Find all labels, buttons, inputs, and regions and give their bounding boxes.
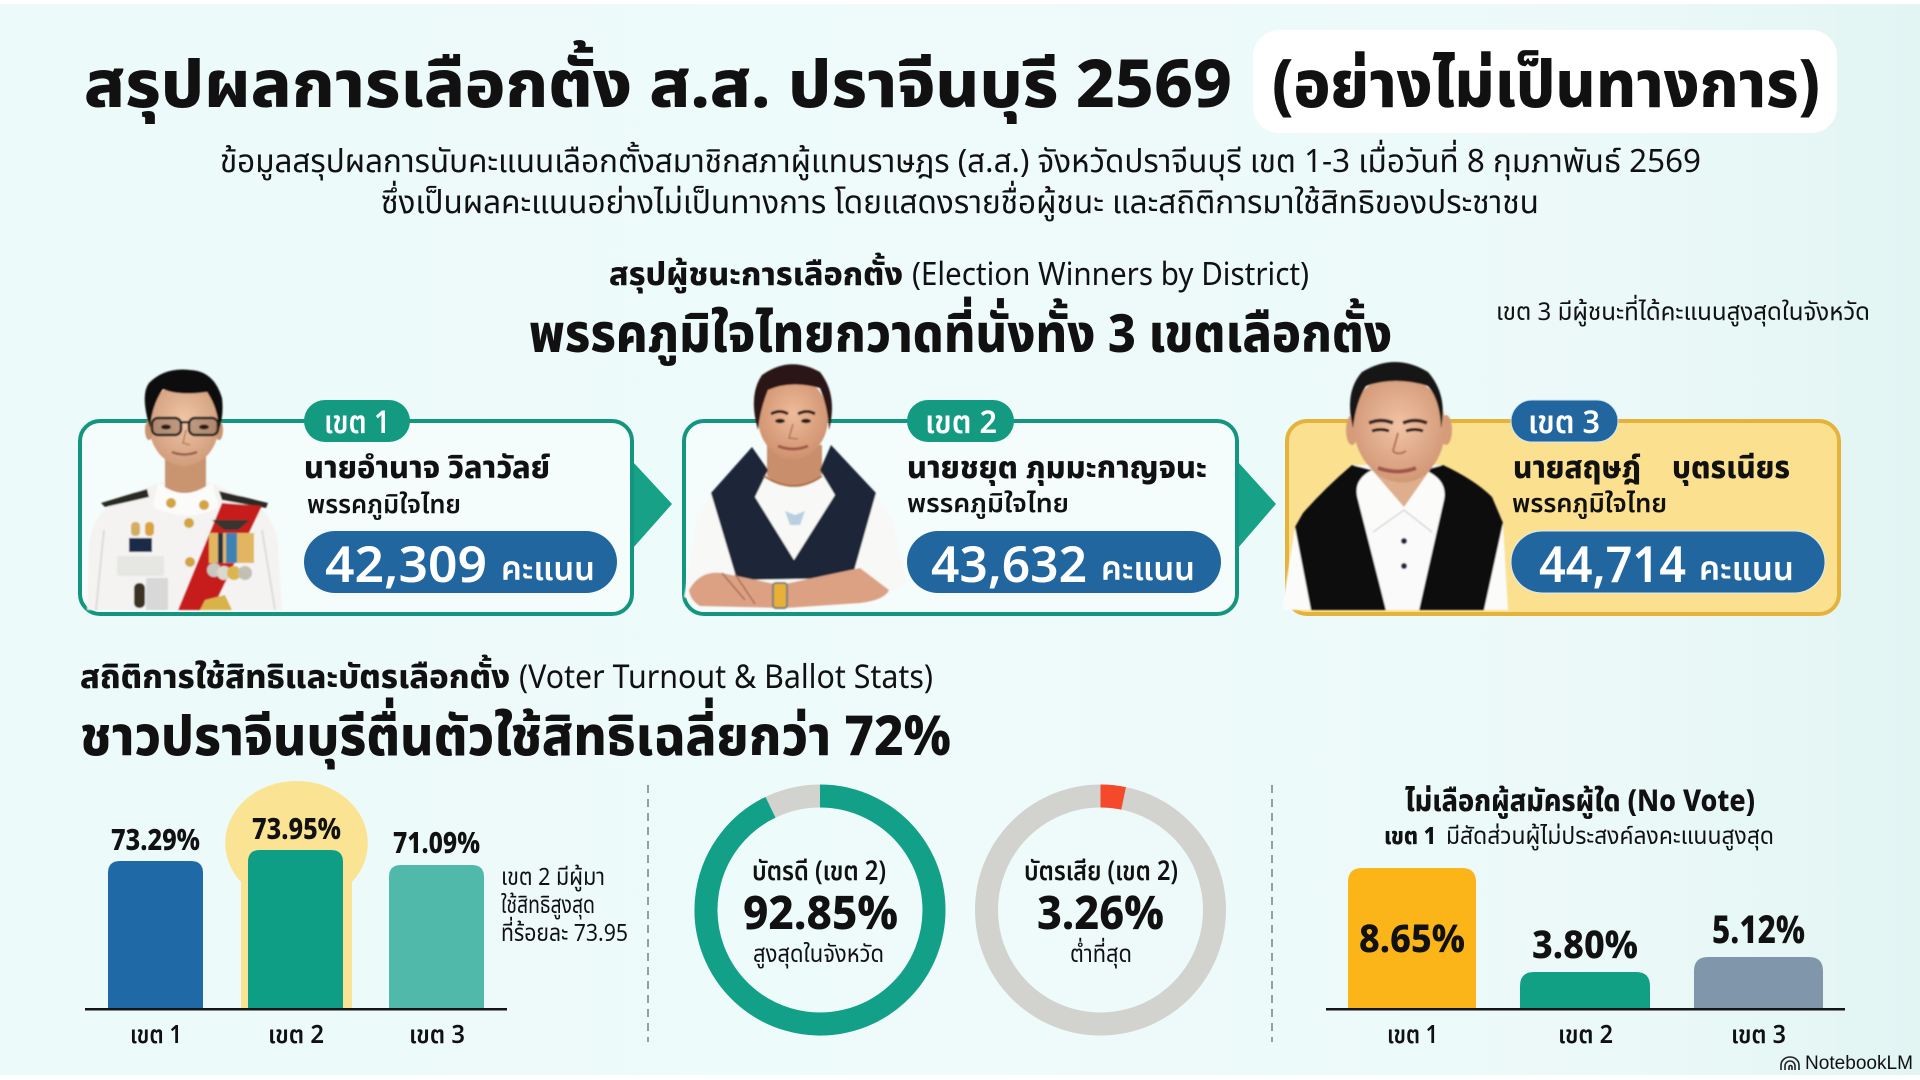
portrait: district 2 winner (684, 364, 907, 608)
party: พรรคภูมิใจไทย (907, 484, 1069, 524)
donut: invalid ballots (986, 796, 1214, 1024)
donut: valid ballots (706, 796, 934, 1024)
donut: invalid ballots: บัตรเสีย (เขต 2) (1024, 852, 1178, 893)
turnout values: 73.29% (111, 820, 200, 864)
no-vote values (1359, 904, 1805, 976)
highlight behind district 2 bar (225, 781, 368, 1009)
district labels: เขต 3 (1731, 1017, 1786, 1055)
arrow: district 1 to 2 (633, 462, 672, 548)
panel: district 3 winner (highlighted) (1282, 362, 1839, 614)
score pill (304, 529, 617, 605)
bar: district 3 (1694, 957, 1823, 1009)
arrow: district 2 to 3 (1238, 462, 1276, 548)
bar: district 2 (248, 850, 343, 1009)
district labels: เขต 1 (1387, 1017, 1438, 1055)
icon: NotebookLM logo (1781, 1057, 1799, 1070)
candidate name: นายสฤษฎ์ (1513, 445, 1641, 492)
subtitle: ข้อมูลสรุปผลการนับคะแนนเลือกตั้งสมาชิกสภาผู้แทนราษฎร (ส.ส.) จังหวัดปราจีนบุรี เขต 1-3 เมื่อวันที่ 8 กุมภาพันธ์ 2569 (220, 139, 1701, 187)
NotebookLM watermark: NotebookLM (1805, 1053, 1913, 1074)
district 3 note: เขต 3 มีผู้ชนะที่ได้คะแนนสูงสุดในจังหวัด (1496, 294, 1870, 332)
title: สรุปผลการเลือกตั้ง ส.ส. ปราจีนบุรี 2569 (84, 37, 1232, 137)
winners section label: (Election Winners by District) (912, 252, 1309, 300)
candidate name: นายอำนาจ วิลาวัลย์ (304, 445, 550, 492)
winners headline: พรรคภูมิใจไทยกวาดที่นั่งทั้ง 3 เขตเลือกตั้ง (529, 296, 1392, 376)
turnout note (501, 860, 628, 952)
district tag: เขต 3 (1528, 400, 1600, 448)
bar: district 2 (1520, 972, 1650, 1009)
bar: district 1 (1348, 868, 1476, 1009)
turnout values (111, 809, 480, 867)
candidate name: บุตรเนียร (1672, 445, 1790, 492)
panel: district 1 winner (80, 370, 632, 614)
no-vote values: 3.80% (1532, 919, 1638, 976)
portrait: district 3 winner (1282, 362, 1508, 610)
turnout section label: สถิติการใช้สิทธิและบัตรเลือกตั้ง (80, 653, 510, 703)
winners section label (609, 252, 1309, 300)
candidate name (1513, 445, 1790, 492)
donut: invalid ballots: 3.26% (1037, 880, 1164, 950)
district tag: เขต 2 (925, 400, 997, 448)
portrait: district 1 winner (87, 370, 282, 610)
no-vote values: 5.12% (1712, 904, 1805, 961)
axis (85, 1008, 507, 1010)
party: พรรคภูมิใจไทย (307, 485, 461, 525)
turnout values: 71.09% (393, 823, 480, 867)
bar: district 3 (389, 865, 484, 1009)
no-vote heading: เขต 1 (1384, 819, 1436, 855)
bar: district 1 (108, 861, 203, 1009)
score pill: 43,632 (931, 529, 1087, 605)
donut: valid ballots: สูงสุดในจังหวัด (753, 937, 884, 973)
donut: valid ballots: 92.85% (743, 880, 898, 950)
bar chart: no vote (1326, 868, 1845, 1055)
no-vote heading: มีสัดส่วนผู้ไม่ประสงค์ลงคะแนนสูงสุด (1446, 819, 1774, 855)
turnout note: ที่ร้อยละ 73.95 (501, 916, 628, 952)
score pill: 44,714 (1539, 529, 1686, 605)
title badge: unofficial: (อย่างไม่เป็นทางการ) (1272, 37, 1820, 137)
district tag: เขต 1 (324, 400, 390, 448)
district labels: เขต 3 (409, 1017, 465, 1055)
score pill: 42,309 (325, 529, 487, 605)
candidate name: นายชยุต ภุมมะกาญจนะ (907, 445, 1207, 492)
no-vote heading (1384, 779, 1774, 855)
axis (1326, 1008, 1845, 1010)
score pill: คะแนน (501, 545, 595, 595)
district labels: เขต 2 (1558, 1017, 1613, 1055)
score pill (1511, 529, 1825, 605)
party: พรรคภูมิใจไทย (1512, 484, 1667, 524)
district labels: เขต 2 (268, 1017, 324, 1055)
score pill (907, 529, 1221, 605)
panel: district 2 winner (684, 364, 1237, 614)
no-vote heading: ไม่เลือกผู้สมัครผู้ใด (No Vote) (1405, 779, 1755, 825)
subtitle (220, 139, 1701, 228)
district labels: เขต 1 (130, 1017, 182, 1055)
turnout values: 73.95% (252, 809, 341, 853)
turnout section label: (Voter Turnout & Ballot Stats) (519, 653, 933, 703)
bar chart: voter turnout (85, 781, 507, 1055)
subtitle: ซึ่งเป็นผลคะแนนอย่างไม่เป็นทางการ โดยแสดงรายชื่อผู้ชนะ และสถิติการมาใช้สิทธิของประชาชน (381, 180, 1539, 228)
turnout section label (80, 653, 933, 703)
score pill: คะแนน (1699, 545, 1794, 595)
no-vote values: 8.65% (1359, 913, 1465, 970)
winners section label: สรุปผู้ชนะการเลือกตั้ง (609, 252, 903, 300)
turnout note: เขต 2 มีผู้มา (501, 860, 605, 896)
district labels (130, 1017, 465, 1055)
turnout note: ใช้สิทธิสูงสุด (501, 888, 595, 924)
donut: invalid ballots: ต่ำที่สุด (1070, 937, 1132, 973)
district labels (1387, 1017, 1786, 1055)
turnout headline: ชาวปราจีนบุรีตื่นตัวใช้สิทธิเฉลี่ยกว่า 72% (80, 697, 951, 780)
score pill: คะแนน (1101, 545, 1195, 595)
donut: valid ballots: บัตรดี (เขต 2) (752, 852, 886, 893)
